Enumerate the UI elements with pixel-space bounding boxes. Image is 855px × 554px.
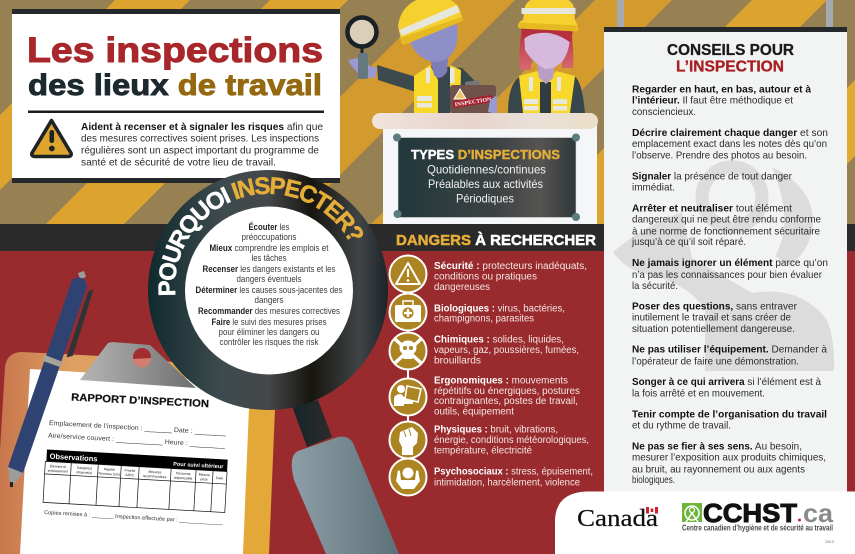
logo: cchst: CCHST: [703, 498, 797, 528]
icon: person in distress: [390, 458, 426, 496]
text: inspection tips: Regarder en haut, en bas, autour et à: [632, 85, 811, 96]
text: reasons to inspect: dangers éventuels: [236, 274, 302, 284]
observations table: Observations: [49, 452, 98, 463]
text: inspection tips: l’intérieur. Il faut être méthodique et: [632, 95, 793, 106]
text: inspection tips: la sécurité.: [632, 281, 678, 292]
panel: conseils pour l'inspection: [604, 27, 847, 492]
text: danger categories: dangereuses: [434, 282, 490, 293]
text: inspection tips: Arrêter et neutraliser tout élément: [632, 204, 792, 215]
watermark: question mark: [613, 167, 834, 371]
striped hazard background: [0, 0, 855, 226]
observations table: prise: [200, 477, 208, 482]
text: inspection tips: biologiques.: [632, 475, 675, 486]
text: danger categories: Biologiques : virus, bactéries,: [434, 303, 565, 314]
clipboard board: [0, 352, 276, 554]
pen: [8, 271, 92, 487]
magnifier held by inspector: [348, 18, 376, 54]
text: danger categories: contraignantes, postes de travail,: [434, 396, 578, 407]
text: danger categories: conditions ou pratiques: [434, 272, 537, 283]
observations table: Élément et: [50, 463, 66, 469]
text: danger categories: Sécurité : protecteurs inadéquats,: [434, 261, 587, 272]
text: inspection tips: mesurer l’exposition aux produits chimiques,: [632, 453, 826, 464]
report sheet: Emplacement de l’inspection : _______ Date : ________: [49, 420, 226, 437]
observations table: Mesure: [199, 473, 210, 477]
text: danger categories: énergie, conditions météorologiques,: [434, 435, 589, 446]
document code: 206-5: [825, 540, 834, 544]
text: danger categories: [434, 261, 593, 488]
panel: dangers list: [390, 256, 593, 496]
icon: ergonomics worker at computer: [390, 378, 426, 416]
report sheet: RAPPORT D’INSPECTION: [71, 392, 209, 410]
intro text: des mesures correctives soient prises. Les inspections: [81, 134, 319, 144]
text: inspection tips: immédiat.: [632, 183, 675, 194]
dark band: [0, 224, 855, 251]
clipboard labelled inspection: [450, 80, 497, 114]
panel: clipboard and report: [0, 271, 276, 554]
intro text: [81, 122, 323, 168]
text: inspection tips: la fois arrêté et en mouvement.: [632, 389, 765, 400]
clipboard labelled inspection: INSPECTION: [454, 97, 492, 108]
text: inspection tips: inutilement le travail et sans créer de: [632, 313, 791, 324]
text: danger categories: outils, équipement: [434, 407, 514, 418]
icon: first-aid kit: [390, 294, 426, 330]
icon: warning triangle: [32, 120, 71, 156]
text: danger categories: répétitifs ou énergiques, postures: [434, 386, 580, 397]
sign: types of inspections: [393, 134, 580, 221]
curved heading: pourquoi inspecter: POURQUOI INSPECTER?: [158, 177, 364, 296]
text: reasons to inspect: les tâches: [252, 253, 287, 263]
sign: types of inspections: Périodiques: [456, 192, 514, 206]
text: danger categories: Physiques : bruit, vibrations,: [434, 424, 558, 435]
text: inspection tips: et du rythme de travail.: [632, 421, 731, 432]
text: danger categories: champignons, parasites: [434, 314, 534, 325]
logo: cchst: [682, 498, 834, 532]
text: inspection tips: Ne pas se fier à ses sens. Au besoin,: [632, 441, 802, 452]
text: inspection tips: n’a pas les connaissances pour bien évaluer: [632, 270, 823, 281]
heading: dangers à rechercher: DANGERS À RECHERCHER: [396, 232, 596, 249]
sign: types of inspections: Quotidiennes/continues: [427, 162, 546, 176]
text: inspection tips: Décrire clairement chaque danger et son: [632, 128, 828, 139]
red lower background: [0, 250, 855, 554]
observations table: observé(s): [76, 470, 92, 475]
text: inspection tips: l’observe. Prendre des photos au besoin.: [632, 151, 807, 162]
text: danger categories: Psychosociaux : stress, épuisement,: [434, 467, 593, 478]
observations table: Danger(s): [77, 466, 92, 471]
heading: conseils pour l'inspection: [667, 42, 794, 76]
text: reasons to inspect: Écouter les: [248, 222, 290, 232]
heading: conseils pour l'inspection: CONSEILS POUR: [667, 42, 794, 59]
text: reasons to inspect: préoccupations: [242, 232, 297, 242]
text: inspection tips: situation potentiellement dangereuse.: [632, 324, 795, 335]
text: inspection tips: Poser des questions, sans entraver: [632, 301, 798, 312]
observations table: Nouveau (o/n): [98, 471, 120, 477]
heading: des lieux de travail: des lieux de travail: [28, 69, 322, 102]
icon: raised fist: [390, 422, 426, 458]
observations table: Priorité: [124, 468, 136, 473]
illustration: inspector woman: [508, 0, 585, 113]
text: inspection tips: [631, 85, 828, 486]
text: reasons to inspect: Recenser les dangers existants et les: [202, 264, 336, 274]
text: inspection tips: au bruit, au rayonnement ou aux agents: [632, 464, 805, 475]
sign: types of inspections: TYPES D’INSPECTIONS: [411, 148, 560, 162]
observations table: Répété: [104, 467, 115, 472]
icon: security warning: [390, 256, 426, 292]
text: danger categories: Ergonomiques : mouvements: [434, 375, 568, 386]
text: reasons to inspect: pour éliminer les dangers ou: [218, 327, 320, 337]
observations table: Personne: [176, 471, 191, 476]
observations table: recommandées: [143, 474, 167, 479]
magnifying glass handle: [292, 400, 399, 554]
support poles: [617, 0, 833, 28]
text: reasons to inspect: Faire le suivi des mesures prises: [212, 317, 327, 327]
text: inspection tips: l’opérateur de faire une démonstration.: [632, 356, 799, 367]
panel: pourquoi inspecter magnifier: [148, 170, 388, 410]
illustration: inspector with magnifier: [348, 0, 497, 114]
text: danger categories: intimidation, harcèlement, violence: [434, 477, 580, 488]
text: inspection tips: dangereux qui ne peut être rendu conforme: [632, 215, 821, 226]
metal clip: [80, 342, 196, 388]
text: reasons to inspect: Mieux comprendre les emplois et: [210, 243, 329, 253]
text: inspection tips: emplacement exact dans les notes dès qu’on: [632, 139, 827, 150]
panel: logos footer: [555, 492, 855, 554]
logo: cchst: ca: [803, 498, 834, 528]
text: reasons to inspect: [196, 222, 343, 347]
text: danger categories: brouillards: [434, 355, 481, 366]
report sheet: Aire/service couvert : ____________ Heure : _________: [48, 433, 225, 449]
panel: types d'inspections desk: [372, 113, 598, 224]
text: inspection tips: Ne jamais ignorer un élément parce qu’on: [632, 258, 828, 269]
text: inspection tips: à une norme de fonctionnement sécuritaire: [632, 226, 820, 237]
text: inspection tips: Signaler la présence de tout danger: [632, 171, 793, 182]
text: inspection tips: jusqu’à ce qu’il soit réparé.: [631, 237, 746, 248]
text: reasons to inspect: Déterminer les causes sous-jacentes des: [196, 285, 343, 295]
intro text: régulières sont un aspect important du programme de: [81, 146, 319, 156]
observations table: Pour suivi ultérieur: [173, 462, 224, 470]
text: danger categories: température, électricité: [434, 446, 532, 457]
icon: skull and crossbones: [390, 332, 426, 370]
text: inspection tips: Tenir compte de l’organisation du travail: [632, 409, 827, 420]
observations table: Date: [216, 476, 223, 480]
report sheet: Copies remises à : _______ Inspection effectuée par : ______________: [44, 510, 224, 526]
intro text: Aident à recenser et à signaler les risques afin que: [81, 122, 323, 133]
report sheet: [20, 369, 276, 554]
text: danger categories: vapeurs, gaz, poussières, fumées,: [434, 345, 579, 356]
heading: conseils pour l'inspection: L’INSPECTION: [676, 59, 784, 76]
text: inspection tips: Ne pas utiliser l’équipement. Demander à: [632, 345, 827, 356]
logo: canada wordmark: Canada: [577, 506, 658, 532]
text: reasons to inspect: contrôler les risques the risk: [220, 337, 319, 347]
observations table: A/B/C: [125, 473, 135, 477]
sign: types of inspections: Préalables aux activités: [428, 177, 543, 191]
observations table: responsable: [174, 476, 193, 481]
heading: les inspections: Les inspections: [27, 31, 323, 70]
intro text: santé et de sécurité de votre lieu de travail.: [81, 158, 276, 168]
text: reasons to inspect: dangers: [254, 295, 284, 305]
text: inspection tips: Songer à ce qui arrivera si l’élément est à: [632, 377, 821, 388]
panel: title: [12, 9, 340, 183]
text: reasons to inspect: Recommander des mesures correctives: [198, 306, 340, 316]
text: inspection tips: consciencieux.: [632, 107, 696, 118]
observations table: [43, 449, 228, 513]
observations table: Mesures: [148, 470, 162, 474]
observations table: emplacement: [48, 469, 68, 474]
text: danger categories: Chimiques : solides, liquides,: [434, 334, 564, 345]
